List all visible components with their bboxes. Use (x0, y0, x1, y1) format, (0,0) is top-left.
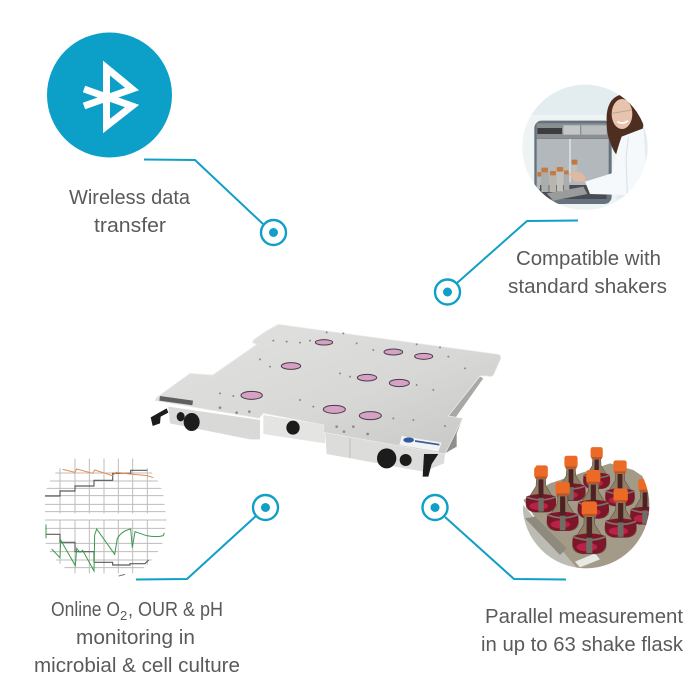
text: online monitoring: Online O (51, 599, 120, 621)
icon: bluetooth circle (47, 32, 172, 158)
text: online monitoring: , OUR & pH (128, 599, 223, 621)
photo: measurement plate (151, 324, 501, 477)
text: parallel measurement (481, 606, 684, 656)
connector: wireless data transfer (144, 160, 286, 245)
text: online monitoring: 2 (120, 608, 127, 623)
photo: scientist at shaker (520, 83, 653, 213)
text: compatible with standard shakers: standard shakers (508, 276, 667, 298)
connector: parallel measurement (422, 495, 566, 580)
text: online monitoring: monitoring in (76, 627, 195, 649)
text: compatible with standard shakers (508, 248, 667, 298)
text: online monitoring: microbial & cell culture (34, 655, 240, 677)
photo: monitoring chart (43, 458, 167, 576)
text: compatible with standard shakers: Compatible with (516, 248, 661, 270)
text: wireless data transfer: transfer (94, 215, 166, 237)
text: online monitoring (34, 599, 240, 677)
text: parallel measurement: Parallel measurement (485, 606, 683, 628)
connector: online monitoring (136, 495, 278, 580)
text: wireless data transfer (69, 187, 191, 237)
text: parallel measurement: in up to 63 shake flask (481, 634, 684, 656)
photo: shake flasks on platform (523, 447, 650, 568)
text: wireless data transfer: Wireless data (69, 187, 191, 209)
connector: compatible with standard shakers (435, 220, 578, 304)
